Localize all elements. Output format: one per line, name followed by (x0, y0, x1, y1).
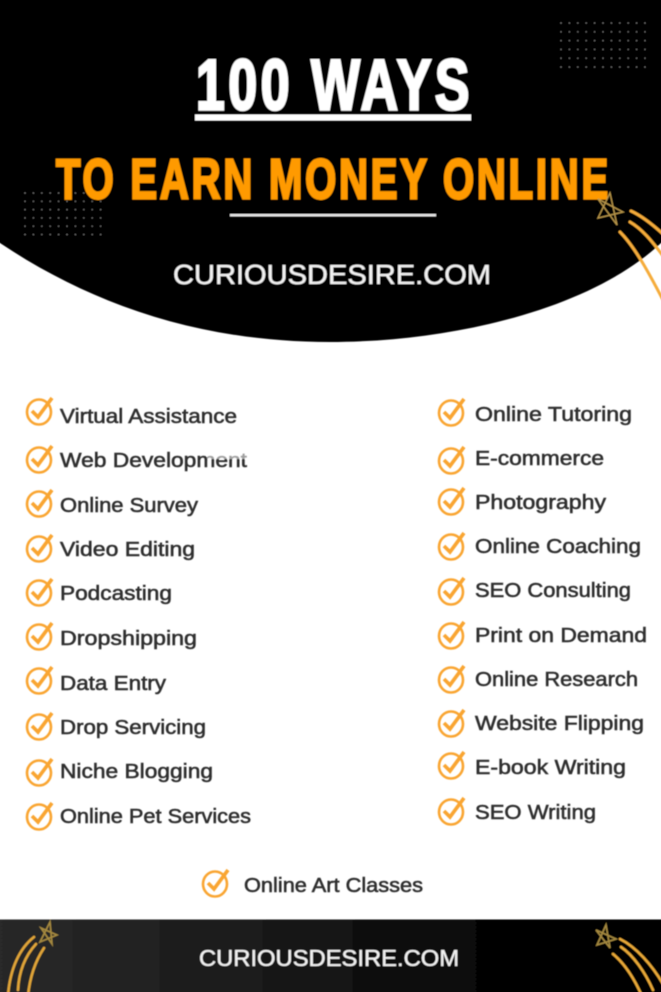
item: Online Pet Services: Online Pet Services (60, 806, 251, 828)
item: SEO Writing: SEO Writing (475, 802, 596, 824)
item: Print on Demand (439, 622, 647, 648)
item: E-book Writing (439, 752, 626, 779)
item: Online Art Classes (203, 870, 423, 897)
item: Photography: Photography (475, 492, 606, 514)
item: Video Editing: Video Editing (60, 539, 195, 561)
item: Online Research: Online Research (475, 669, 638, 691)
item: Website Flipping: Website Flipping (475, 713, 644, 735)
icon: shooting star bottom right (596, 925, 661, 992)
item: Online Research (439, 666, 638, 692)
item: Data Entry (27, 667, 166, 695)
item: Online Pet Services (27, 803, 251, 830)
item: SEO Writing (439, 798, 596, 824)
item: Video Editing (27, 535, 195, 562)
item: SEO Consulting: SEO Consulting (475, 580, 631, 602)
website name: CURIOUSDESIRE.COM (173, 259, 491, 290)
title underline (195, 114, 471, 120)
item: Podcasting: Podcasting (60, 583, 172, 605)
item: Niche Blogging (27, 759, 213, 786)
title: 100 WAYS: 100 WAYS (196, 46, 473, 126)
item: Dropshipping (27, 623, 197, 650)
right list column (439, 399, 647, 824)
item: E-commerce: E-commerce (475, 448, 604, 470)
item: Online Tutoring (439, 399, 632, 426)
icon: shooting star bottom left (8, 922, 57, 992)
item: Data Entry: Data Entry (60, 673, 166, 695)
item: Online Coaching (439, 533, 641, 560)
item: SEO Consulting (439, 578, 631, 604)
item: E-book Writing: E-book Writing (475, 757, 626, 779)
item: Website Flipping (439, 710, 644, 736)
item: Web Development: Web Development (60, 450, 247, 472)
item: E-commerce (439, 447, 604, 474)
item: Web Development (27, 446, 248, 472)
item: Dropshipping: Dropshipping (60, 628, 197, 650)
icon: shooting star top right (598, 193, 661, 300)
item: Drop Servicing: Drop Servicing (60, 717, 206, 739)
item: Drop Servicing (27, 713, 206, 740)
item: Online Tutoring: Online Tutoring (475, 404, 632, 426)
item: Virtual Assistance (27, 398, 237, 428)
item: Online Survey (27, 490, 198, 517)
footer band (0, 920, 661, 992)
item: Print on Demand: Print on Demand (475, 625, 647, 647)
item: Online Coaching: Online Coaching (475, 536, 641, 558)
header black curved panel (0, 0, 661, 342)
divider line (230, 214, 436, 216)
item: Online Survey: Online Survey (60, 495, 198, 517)
item: Online Art Classes: Online Art Classes (244, 875, 423, 897)
item: Photography (439, 488, 606, 514)
item: Podcasting (27, 579, 172, 606)
left list column (27, 398, 251, 830)
item: Niche Blogging: Niche Blogging (60, 761, 213, 783)
dot grid left (24, 192, 104, 236)
item: Virtual Assistance: Virtual Assistance (60, 406, 237, 428)
footer website name: CURIOUSDESIRE.COM (199, 945, 459, 971)
dot grid top right (560, 22, 646, 68)
